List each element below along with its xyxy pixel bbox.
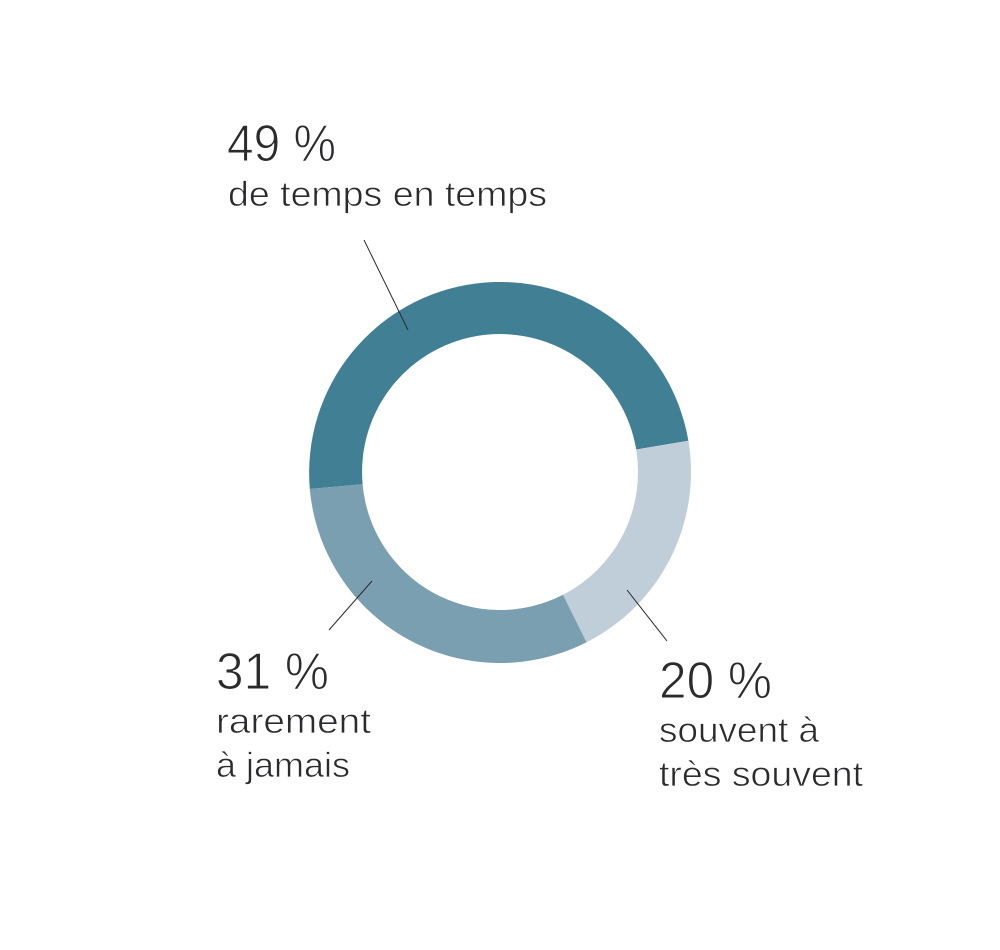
label: 31% rarement à jamais: 31 % <box>216 643 329 701</box>
label: 20% souvent à très souvent: très souvent <box>659 755 863 794</box>
label: 31% rarement à jamais <box>216 643 371 785</box>
label: 49% de temps en temps: de temps en temps <box>228 175 547 214</box>
segment: 49% de temps en temps <box>309 282 688 489</box>
label: 20% souvent à très souvent: 20 % <box>659 652 772 710</box>
label: 49% de temps en temps: 49 % <box>227 115 336 173</box>
label: 31% rarement à jamais: à jamais <box>216 746 350 785</box>
label: 20% souvent à très souvent <box>659 652 863 794</box>
leader line: 31% <box>329 581 372 630</box>
segment: 20% souvent à très souvent <box>563 441 691 642</box>
donut chart <box>309 282 691 663</box>
label: 31% rarement à jamais: rarement <box>216 702 371 741</box>
segment: 31% rarement à jamais <box>310 484 586 663</box>
leader line: 49% <box>364 240 408 330</box>
leader line: 20% <box>627 590 667 641</box>
label: 49% de temps en temps <box>227 115 547 214</box>
label: 20% souvent à très souvent: souvent à <box>659 711 820 750</box>
